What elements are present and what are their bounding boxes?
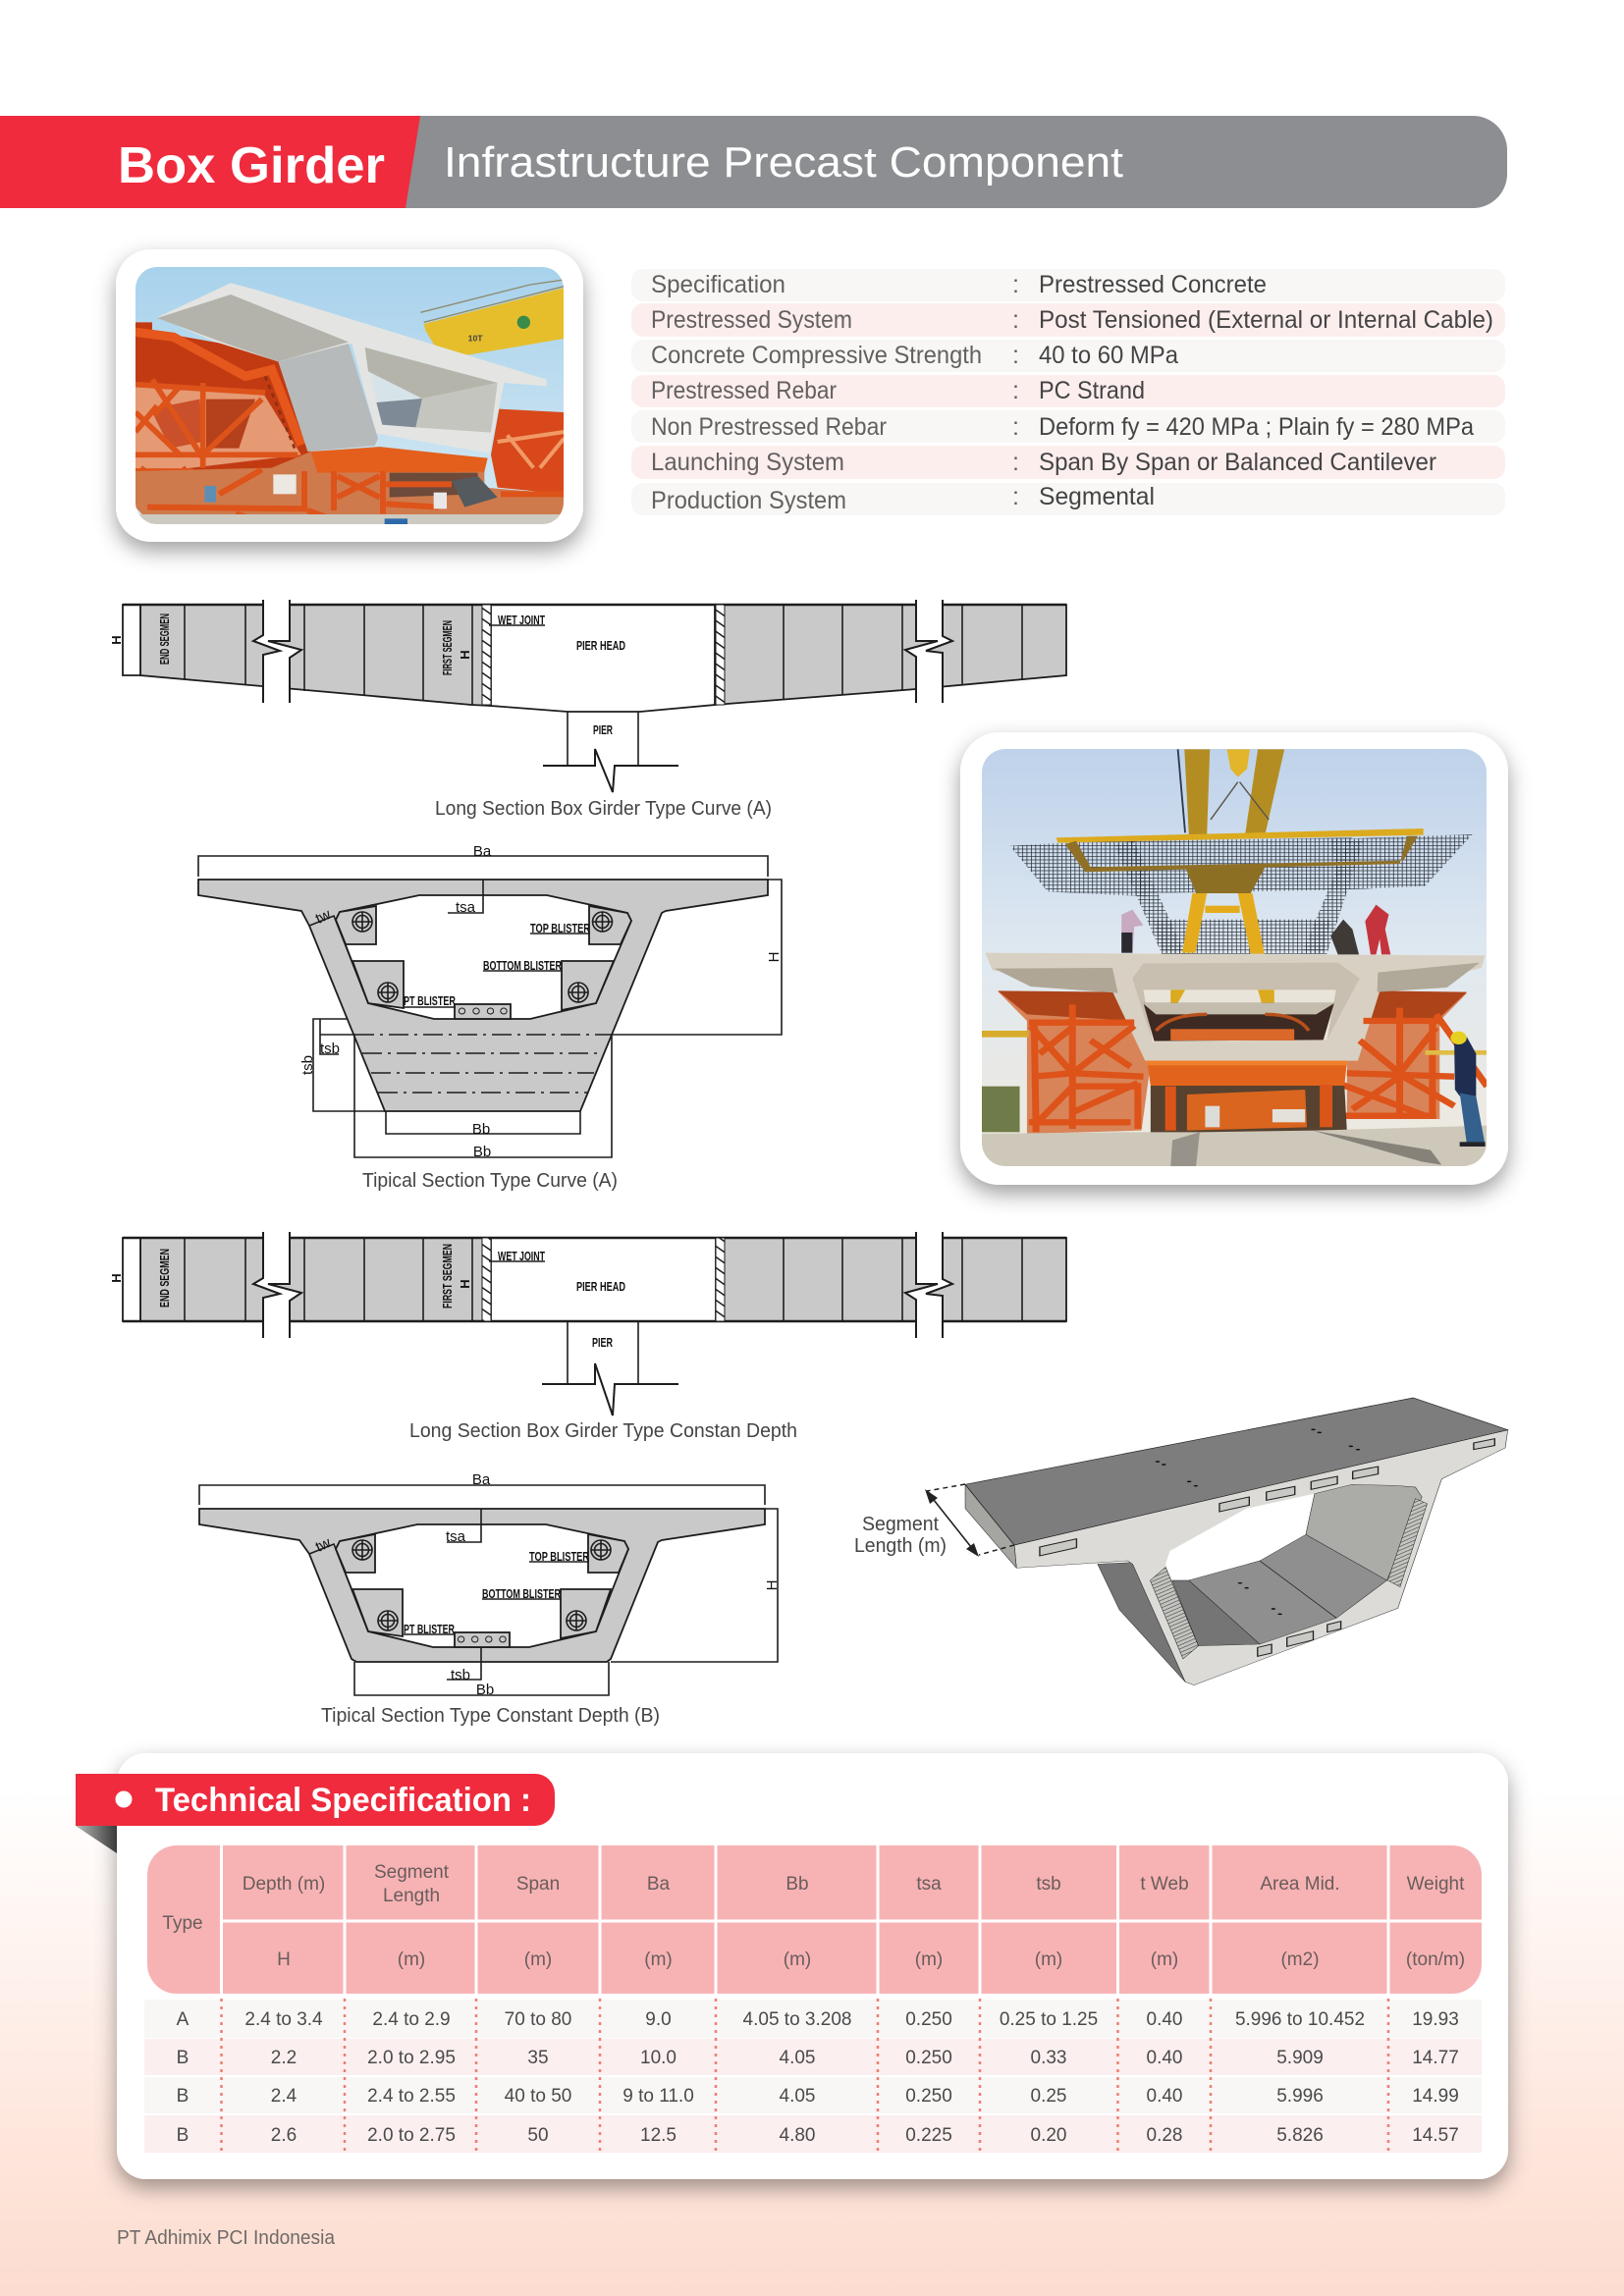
dimension labels: Bb — [472, 1121, 490, 1138]
photo: rebar cage lifted onto segment — [982, 749, 1487, 1166]
table row B 2.4: 40 to 50 — [505, 2086, 571, 2107]
spec: production system: Segmental — [1039, 483, 1155, 510]
table header: Area Mid. — [1260, 1874, 1340, 1895]
table row A: 2.4 to 2.9 — [372, 2009, 451, 2030]
dimension labels — [299, 843, 783, 1160]
card frame — [116, 249, 583, 542]
orange formwork right — [1338, 1008, 1487, 1116]
spec: non prestressed rebar: Non Prestressed Rebar — [651, 413, 887, 441]
table row B 2.4: 0.250 — [905, 2086, 952, 2107]
subtitle: Infrastructure Precast Component — [444, 138, 1123, 187]
drawing labels: PIER HEAD — [576, 638, 625, 653]
dimension labels: BOTTOM BLISTER — [482, 1586, 561, 1601]
table row A: 0.25 to 1.25 — [1000, 2009, 1098, 2030]
caption: long section curve: Long Section Box Girder Type Curve (A) — [435, 798, 772, 820]
dotted column separators — [222, 1999, 1388, 2155]
duct slots — [1040, 1439, 1494, 1656]
card — [117, 1753, 1508, 2179]
double arrow — [925, 1489, 979, 1557]
drawing labels: FIRST SEGMEN — [440, 1244, 455, 1308]
banner red tab — [0, 116, 420, 208]
table row A: 70 to 80 — [505, 2009, 571, 2030]
table header: Segment — [374, 1862, 450, 1883]
table row B 2.6: 50 — [527, 2125, 549, 2146]
banner grey band — [393, 116, 1507, 208]
table header: (m) — [524, 1949, 552, 1970]
table header: (m) — [784, 1949, 811, 1970]
table row A: 5.996 to 10.452 — [1235, 2009, 1365, 2030]
table row B 2.6: 2.6 — [271, 2125, 297, 2146]
table row B 2.6: 0.225 — [905, 2125, 952, 2146]
row backgrounds — [631, 269, 1505, 515]
drawing labels: END SEGMEN — [157, 1249, 172, 1308]
dimension labels: tw — [313, 906, 334, 928]
label: Segment — [862, 1514, 939, 1535]
dimension labels: tsb — [451, 1667, 470, 1683]
spec: non prestressed rebar: Deform fy = 420 MPa ; Plain fy = 280 MPa — [1039, 413, 1474, 441]
drawing labels — [109, 1244, 625, 1350]
table header: (m) — [398, 1949, 425, 1970]
pier — [542, 1321, 678, 1415]
table row B 2.6: 0.28 — [1147, 2125, 1182, 2146]
blisters — [336, 906, 631, 1019]
table header: Type — [162, 1913, 203, 1934]
table row A: 0.250 — [905, 2009, 952, 2030]
table row B 2.4: 0.40 — [1147, 2086, 1182, 2107]
scaffold backdrop — [998, 991, 1151, 1134]
spec: prestressed system — [651, 306, 1493, 334]
orange formwork left — [1029, 1004, 1143, 1132]
spec: specification: Specification — [651, 271, 785, 298]
table row B 2.6: B — [177, 2125, 189, 2146]
spec: launching system: Launching System — [651, 449, 844, 476]
chart: long section type curve — [109, 595, 1066, 792]
drawing labels: PIER — [592, 1335, 613, 1350]
spec: specification: Prestressed Concrete — [1039, 271, 1267, 298]
table header — [147, 1845, 1482, 1994]
callout: segment length — [854, 1484, 1014, 1557]
dimension labels: H — [766, 952, 783, 962]
table row B 2.4: 2.4 to 2.55 — [367, 2086, 456, 2107]
table header: (m2) — [1280, 1949, 1320, 1970]
blisters — [336, 1534, 628, 1647]
table row B 2.2: 35 — [527, 2048, 549, 2068]
table row B 2.6: 0.20 — [1031, 2125, 1066, 2146]
table row B 2.4: 2.4 — [271, 2086, 298, 2107]
spec: compressive strength — [651, 342, 1178, 369]
dimension labels: TOP BLISTER — [529, 1549, 589, 1564]
dimension labels: Ba — [472, 1471, 491, 1488]
ribbon fold — [76, 1826, 117, 1853]
table row A: 2.4 to 3.4 — [244, 2009, 323, 2030]
photo: box girder on formwork: 10T — [468, 333, 483, 343]
table header: (m) — [1151, 1949, 1178, 1970]
table row A: 19.93 — [1412, 2009, 1459, 2030]
spec: production system: : — [1012, 483, 1019, 510]
drawing labels: WET JOINT — [498, 613, 545, 627]
pier — [543, 712, 678, 792]
table row B 2.2: 2.2 — [271, 2048, 297, 2068]
table row B 2.6 — [177, 2125, 1459, 2146]
table row B 2.2: 0.40 — [1147, 2048, 1182, 2068]
table row A: 0.40 — [1147, 2009, 1182, 2030]
spec: compressive strength: : — [1012, 342, 1019, 369]
drawing labels: H — [109, 1273, 124, 1283]
table header: tsb — [1036, 1874, 1061, 1895]
void left wall — [1172, 1580, 1260, 1646]
table header: Span — [516, 1874, 560, 1895]
dimension labels: tsa — [456, 899, 476, 916]
panel: large photo card — [960, 732, 1508, 1185]
dimension labels: PT BLISTER — [404, 1622, 455, 1636]
spec: specification: : — [1012, 271, 1019, 298]
drawing labels: H — [458, 1279, 472, 1289]
chart: long section constant depth — [109, 1227, 1066, 1415]
panel: specification list — [631, 269, 1505, 515]
table row B 2.6: 4.80 — [780, 2125, 815, 2146]
void see-through — [1165, 1494, 1315, 1580]
table row B 2.4: 9 to 11.0 — [623, 2086, 694, 2107]
drawing labels: PIER — [593, 722, 613, 737]
table row A: 4.05 to 3.208 — [743, 2009, 851, 2030]
dimension lines — [199, 1485, 778, 1695]
spec: prestressed system: Prestressed System — [651, 306, 852, 334]
spec: specification — [651, 271, 1267, 298]
web thickness line — [309, 916, 368, 1003]
table row A: A — [177, 2009, 189, 2030]
duct holes — [1156, 1428, 1360, 1615]
caption: typical section curve: Tipical Section Type Curve (A) — [362, 1170, 618, 1192]
table row A — [177, 2009, 1459, 2030]
label: Length (m) — [854, 1535, 947, 1557]
ribbon heading: Technical Specification : — [155, 1782, 531, 1819]
caption: typical section constant depth: Tipical Section Type Constant Depth (B) — [321, 1705, 660, 1727]
dimension labels: tsa — [446, 1528, 466, 1545]
drawing labels: WET JOINT — [498, 1249, 545, 1263]
table row B 2.6: 12.5 — [640, 2125, 677, 2146]
footer: PT Adhimix PCI Indonesia — [117, 2227, 336, 2249]
table row B 2.2: B — [177, 2048, 189, 2068]
table header: (m) — [915, 1949, 943, 1970]
drawing labels — [109, 613, 625, 737]
spec: non prestressed rebar: : — [1012, 413, 1019, 441]
table header: (m) — [1035, 1949, 1062, 1970]
table row B 2.6: 14.57 — [1412, 2125, 1459, 2146]
chart: typical section constant depth — [199, 1471, 781, 1698]
table row B 2.4: 4.05 — [780, 2086, 815, 2107]
table header: (ton/m) — [1406, 1949, 1465, 1970]
table row B 2.2: 14.77 — [1412, 2048, 1459, 2068]
spec: compressive strength: Concrete Compressive Strength — [651, 342, 982, 369]
caption: long section constant depth: Long Section Box Girder Type Constan Depth — [409, 1420, 797, 1442]
panel: technical specification — [76, 1753, 1508, 2179]
dimension labels: Ba — [473, 843, 492, 860]
table row B 2.4: 0.25 — [1031, 2086, 1066, 2107]
table row B 2.4: 14.99 — [1412, 2086, 1459, 2107]
table row B 2.2: 0.250 — [905, 2048, 952, 2068]
table header: Depth (m) — [243, 1874, 325, 1895]
dimension labels: tsb — [320, 1041, 340, 1057]
front face — [1014, 1430, 1508, 1685]
title: Box Girder — [118, 137, 385, 194]
deck top — [965, 1398, 1508, 1545]
panel: top photo card — [116, 249, 583, 542]
spec: production system: Production System — [651, 487, 846, 514]
spec: launching system: Span By Span or Balanced Cantilever — [1039, 449, 1436, 476]
dimension labels: Bb — [473, 1144, 491, 1160]
spec: compressive strength: 40 to 60 MPa — [1039, 342, 1178, 369]
table header: (m) — [644, 1949, 673, 1970]
dimension labels: PT BLISTER — [404, 993, 456, 1008]
segment dash-dot lines — [354, 1035, 611, 1093]
spec: production system — [651, 483, 1155, 514]
dimension labels: TOP BLISTER — [530, 921, 590, 935]
table row B 2.2 — [177, 2048, 1459, 2068]
drawing labels: H — [458, 650, 472, 660]
photo: box girder on formwork — [135, 267, 564, 524]
table header: Bb — [785, 1874, 809, 1895]
spec: launching system — [651, 449, 1436, 476]
table row B 2.4: 5.996 — [1276, 2086, 1324, 2107]
table row B 2.6: 2.0 to 2.75 — [367, 2125, 456, 2146]
dimension labels: tsb — [299, 1055, 316, 1075]
header banner — [0, 116, 1507, 208]
workers — [1121, 910, 1143, 953]
spec: non prestressed rebar — [651, 413, 1474, 441]
table header: Weight — [1407, 1874, 1465, 1895]
table row B 2.4: B — [177, 2086, 189, 2107]
void back wall — [1306, 1484, 1422, 1580]
table row B 2.2: 4.05 — [780, 2048, 815, 2068]
spec: prestressed rebar: Prestressed Rebar — [651, 377, 837, 404]
spec: prestressed rebar: PC Strand — [1039, 377, 1145, 404]
chart: typical section type curve — [198, 843, 783, 1160]
deck side — [965, 1484, 1016, 1568]
dimension labels: BOTTOM BLISTER — [483, 958, 562, 973]
dimension lines — [198, 856, 782, 1157]
dimension labels — [313, 1471, 781, 1698]
table row B 2.2: 5.909 — [1276, 2048, 1324, 2068]
table header: Length — [383, 1886, 440, 1906]
table row B 2.2: 10.0 — [640, 2048, 677, 2068]
table row B 2.6: 5.826 — [1276, 2125, 1324, 2146]
dimension labels: H — [764, 1580, 781, 1590]
drawing labels: END SEGMEN — [157, 614, 172, 665]
spec: prestressed rebar — [651, 377, 1145, 404]
table header: H — [277, 1949, 291, 1970]
spec: prestressed system: Post Tensioned (External or Internal Cable) — [1039, 306, 1493, 334]
drawing labels: FIRST SEGMEN — [440, 620, 455, 675]
table row backgrounds — [144, 2000, 1482, 2153]
table row A: 9.0 — [645, 2009, 672, 2030]
table header: Ba — [647, 1874, 671, 1895]
table row B 2.4 — [177, 2086, 1459, 2107]
dimension labels: tw — [313, 1534, 334, 1556]
spec: prestressed system: : — [1012, 306, 1019, 334]
dimension labels: Bb — [476, 1682, 494, 1698]
void floor — [1189, 1534, 1387, 1644]
ribbon heading — [76, 1774, 555, 1826]
card frame — [960, 732, 1508, 1185]
web thickness line — [309, 1544, 368, 1631]
table header: t Web — [1140, 1874, 1189, 1895]
drawing labels: H — [109, 635, 124, 645]
label — [854, 1514, 947, 1557]
table row B 2.2: 0.33 — [1031, 2048, 1066, 2068]
illustration: 3D segment — [965, 1398, 1508, 1685]
anchor ribs — [1150, 1499, 1428, 1659]
right worker — [1454, 1038, 1476, 1096]
drawing labels: PIER HEAD — [576, 1279, 625, 1294]
table header: tsa — [916, 1874, 942, 1895]
outer web side — [1098, 1563, 1185, 1682]
spec: launching system: : — [1012, 449, 1019, 476]
table row B 2.2: 2.0 to 2.95 — [367, 2048, 456, 2068]
spec: prestressed rebar: : — [1012, 377, 1019, 404]
dashed leaders — [927, 1484, 1014, 1555]
